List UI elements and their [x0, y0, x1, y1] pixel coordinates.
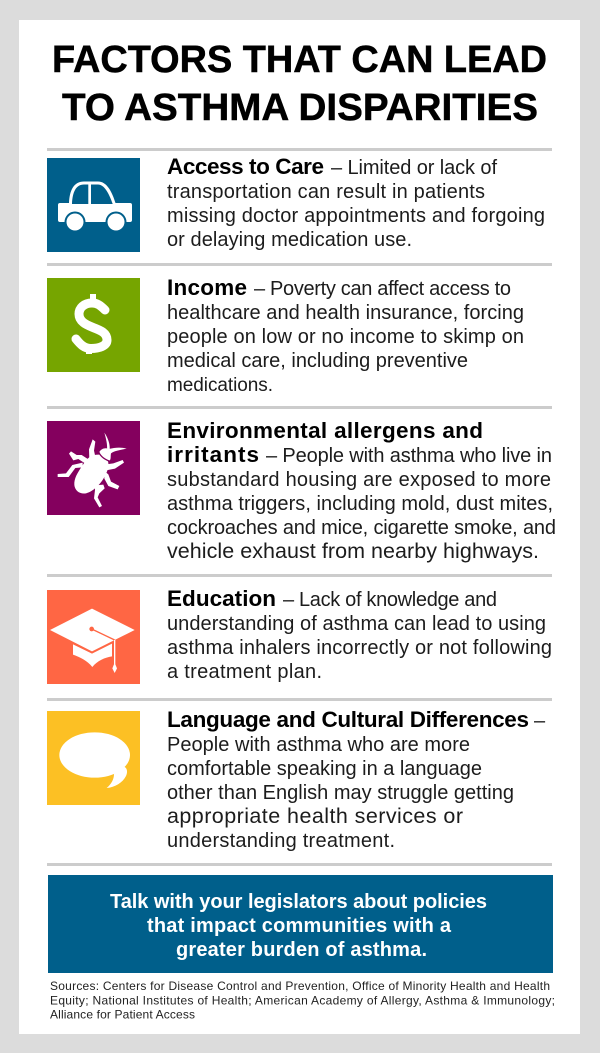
callout — [48, 875, 553, 973]
text: language and cultural differences — [167, 707, 546, 852]
icon: car — [47, 158, 140, 252]
title: TO ASTHMA DISPARITIES — [62, 87, 538, 129]
icon: speech bubble — [47, 711, 140, 805]
sources: Equity; National Institutes of Health; American Academy of Allergy, Asthma & Immunology; — [50, 994, 555, 1008]
text: environmental allergens: irritants — [167, 442, 259, 467]
text: environmental allergens — [167, 418, 556, 563]
text: access to care: transportation can result in patients — [167, 181, 485, 203]
text: access to care: – Limited or lack of — [331, 157, 497, 179]
text: income: healthcare and health insurance, forcing — [167, 302, 524, 324]
text: access to care: missing doctor appointments and forgoing — [167, 205, 545, 227]
text: education: understanding of asthma can lead to using — [167, 613, 546, 635]
text: environmental allergens: vehicle exhaust from nearby highways. — [167, 539, 539, 563]
text: income: Income — [167, 275, 247, 300]
text: environmental allergens: Environmental allergens and — [167, 418, 483, 443]
text: education: – Lack of knowledge and — [283, 589, 497, 611]
text: income: medications. — [167, 375, 273, 396]
text: education — [167, 586, 552, 683]
text: access to care: Access to Care — [167, 154, 324, 179]
icon: graduation cap — [47, 590, 140, 684]
text: education: asthma inhalers incorrectly or not following — [167, 637, 552, 659]
text: education: a treatment plan. — [167, 661, 322, 683]
sources: Alliance for Patient Access — [50, 1008, 195, 1022]
text: income: medical care, including preventive — [167, 350, 468, 372]
sources — [50, 979, 555, 1022]
callout: greater burden of asthma. — [176, 939, 427, 961]
text: language and cultural differences: appropriate health services or — [167, 804, 463, 828]
text: access to care: or delaying medication use. — [167, 229, 412, 251]
icon: dollar sign — [47, 278, 140, 372]
text: environmental allergens: cockroaches and mice, cigarette smoke, and — [167, 517, 556, 539]
text: language and cultural differences: comfortable speaking in a language — [167, 758, 482, 780]
text: language and cultural differences: Language and Cultural Differences — [167, 707, 529, 732]
text: language and cultural differences: – — [534, 710, 546, 732]
text: environmental allergens: substandard housing are exposed to more — [167, 469, 551, 491]
title: FACTORS THAT CAN LEAD — [52, 39, 547, 81]
text: income: people on low or no income to skimp on — [167, 326, 524, 348]
callout: that impact communities with a — [147, 915, 452, 937]
text: environmental allergens: asthma triggers, including mold, dust mites, — [167, 493, 553, 515]
text: language and cultural differences: other than English may struggle getting — [167, 782, 514, 804]
sources: Sources: Centers for Disease Control and Prevention, Office of Minority Health and Health — [50, 979, 550, 993]
text: environmental allergens: – People with asthma who live in — [266, 445, 552, 467]
callout: Talk with your legislators about policies — [110, 891, 487, 913]
title — [52, 39, 547, 129]
text: education: Education — [167, 586, 276, 611]
text: income — [167, 275, 524, 396]
icon: cockroach — [47, 421, 140, 515]
text: language and cultural differences: People with asthma who are more — [167, 734, 470, 756]
text: income: – Poverty can affect access to — [254, 278, 511, 300]
text: access to care — [167, 154, 545, 251]
text: language and cultural differences: understanding treatment. — [167, 830, 395, 852]
